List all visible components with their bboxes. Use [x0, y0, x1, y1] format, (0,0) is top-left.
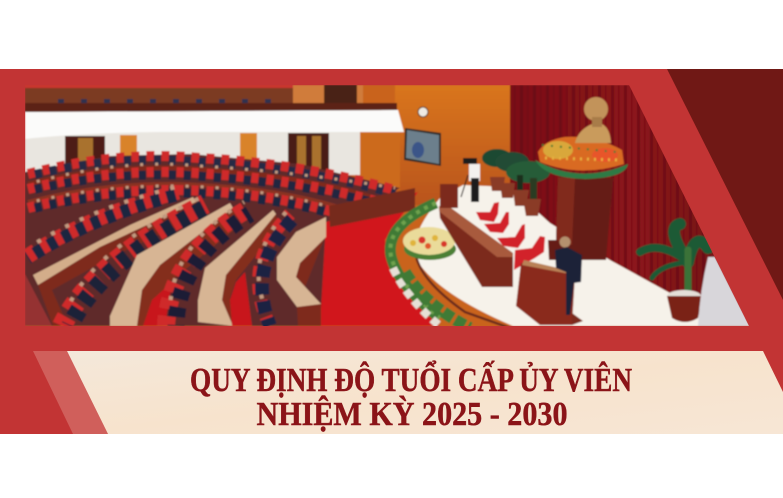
- speaker: [555, 236, 582, 315]
- curved desk row 2: [62, 196, 240, 326]
- cameraman: [461, 158, 480, 202]
- red carpet: [320, 192, 440, 326]
- dark red corner shape: [667, 69, 783, 300]
- back seating rows: [28, 156, 395, 216]
- flower arrangement on stage edge: [403, 227, 456, 260]
- banner background: [67, 351, 783, 434]
- pedestal: [548, 177, 613, 260]
- title banner: [33, 351, 783, 434]
- flower display: [535, 137, 628, 179]
- title line 1: QUY ĐỊNH ĐỘ TUỔI CẤP ỦY VIÊN: [190, 360, 632, 399]
- infographic header: [0, 69, 783, 434]
- stage floor: [414, 185, 720, 326]
- wall screen and clock: [404, 107, 441, 166]
- red chairs on stage: [476, 202, 545, 270]
- curved desk row 1: [28, 186, 198, 326]
- curtain behind the bust: [509, 85, 726, 296]
- white ceiling band: [25, 110, 404, 139]
- translucent corner triangle: [25, 274, 52, 326]
- carpet wedge: [142, 289, 172, 326]
- upper balcony: [25, 85, 397, 112]
- bust of Ho Chi Minh: [575, 97, 611, 143]
- photo: party congress hall: [25, 85, 760, 330]
- banner accent strip: [33, 351, 108, 434]
- right back desk: [329, 188, 415, 227]
- speaker lectern: [516, 260, 583, 325]
- hall walls: [25, 85, 755, 330]
- red background band: [0, 69, 783, 434]
- plant border: [390, 203, 440, 318]
- curved desk row 3: [143, 202, 278, 326]
- title line 2: NHIỆM KỲ 2025 - 2030: [256, 395, 568, 433]
- white foreground object: [698, 257, 750, 326]
- presidium table: [439, 184, 513, 287]
- potted plant: [640, 224, 708, 322]
- potted palms: [482, 149, 550, 216]
- seating base: [25, 154, 400, 326]
- curved desk row 4: [230, 210, 326, 326]
- carpet wedge: [230, 272, 252, 326]
